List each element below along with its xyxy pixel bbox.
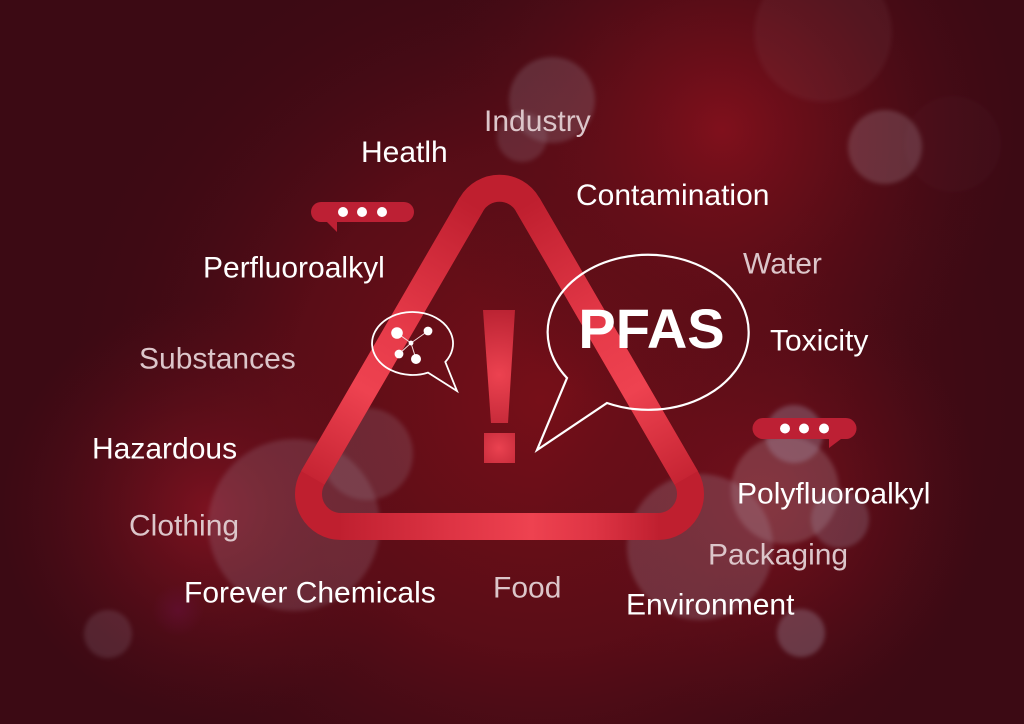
speech bubble: PFAS <box>537 255 749 450</box>
PFAS label: PFAS <box>578 297 725 360</box>
word: Environment: Environment <box>626 588 795 622</box>
word: Perfluoroalkyl: Perfluoroalkyl <box>203 252 385 284</box>
warning triangle <box>308 188 691 526</box>
word: Water: Water <box>743 248 822 280</box>
word: Toxicity: Toxicity <box>770 324 868 358</box>
word: Industry: Industry <box>484 105 591 138</box>
keyword labels <box>92 105 930 622</box>
word: Packaging: Packaging <box>708 538 848 572</box>
word: Contamination: Contamination <box>576 179 769 212</box>
word: Clothing: Clothing <box>129 510 239 542</box>
icon: chat bubble right <box>753 418 856 448</box>
word: Forever Chemicals: Forever Chemicals <box>184 576 436 610</box>
icon: chat bubble left <box>311 202 414 232</box>
icon: molecule <box>391 327 432 364</box>
word: Polyfluoroalkyl: Polyfluoroalkyl <box>737 478 930 510</box>
word: Heatlh: Heatlh <box>361 136 448 169</box>
speech bubble: molecule icon <box>372 312 457 391</box>
word: Hazardous: Hazardous <box>92 432 237 466</box>
word: Substances: Substances <box>139 342 296 376</box>
word: Food: Food <box>493 572 561 604</box>
exclamation mark <box>483 310 515 463</box>
